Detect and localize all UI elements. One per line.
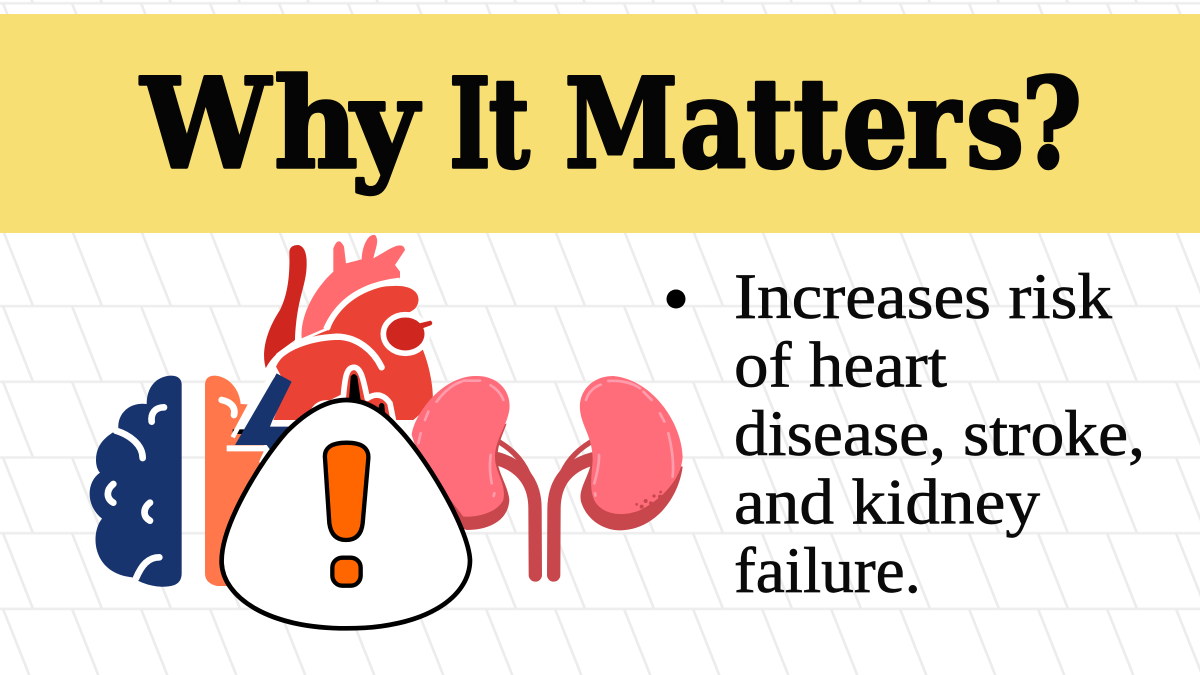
title: It [449, 52, 530, 197]
ureters [497, 442, 593, 575]
text line 3: disease, stroke, [734, 398, 1145, 470]
base stripe [272, 420, 432, 428]
aorta [302, 235, 405, 338]
exclamation bar [325, 443, 368, 540]
icon: lightning bolt [227, 373, 307, 463]
title banner [0, 14, 1200, 233]
bullet dot [666, 290, 686, 308]
highlights [418, 381, 673, 496]
bullet text [666, 261, 1145, 607]
text line 2: of heart [734, 330, 947, 402]
right kidney [580, 376, 683, 514]
icon: heart [264, 235, 433, 428]
icon: brain half [90, 376, 182, 587]
exclamation dot [332, 558, 361, 586]
title: Matters? [564, 51, 1082, 196]
icon: orange brain half [205, 376, 267, 586]
title [139, 51, 1082, 197]
kidney speckles [635, 491, 662, 509]
ecg mark [310, 367, 393, 420]
heart white seams [268, 337, 382, 370]
text line 1: Increases risk [734, 261, 1113, 333]
text line 4: and kidney [734, 466, 1041, 538]
left kidney shadow [433, 423, 509, 530]
left kidney [412, 376, 510, 517]
right kidney shadow [580, 453, 683, 530]
dark vein [264, 245, 307, 371]
chamber [383, 315, 427, 353]
text line 5: failure. [734, 535, 921, 607]
heart body [273, 286, 433, 420]
icon: kidneys [412, 376, 683, 575]
title: Why [139, 52, 421, 197]
icon: warning sign [222, 400, 470, 628]
